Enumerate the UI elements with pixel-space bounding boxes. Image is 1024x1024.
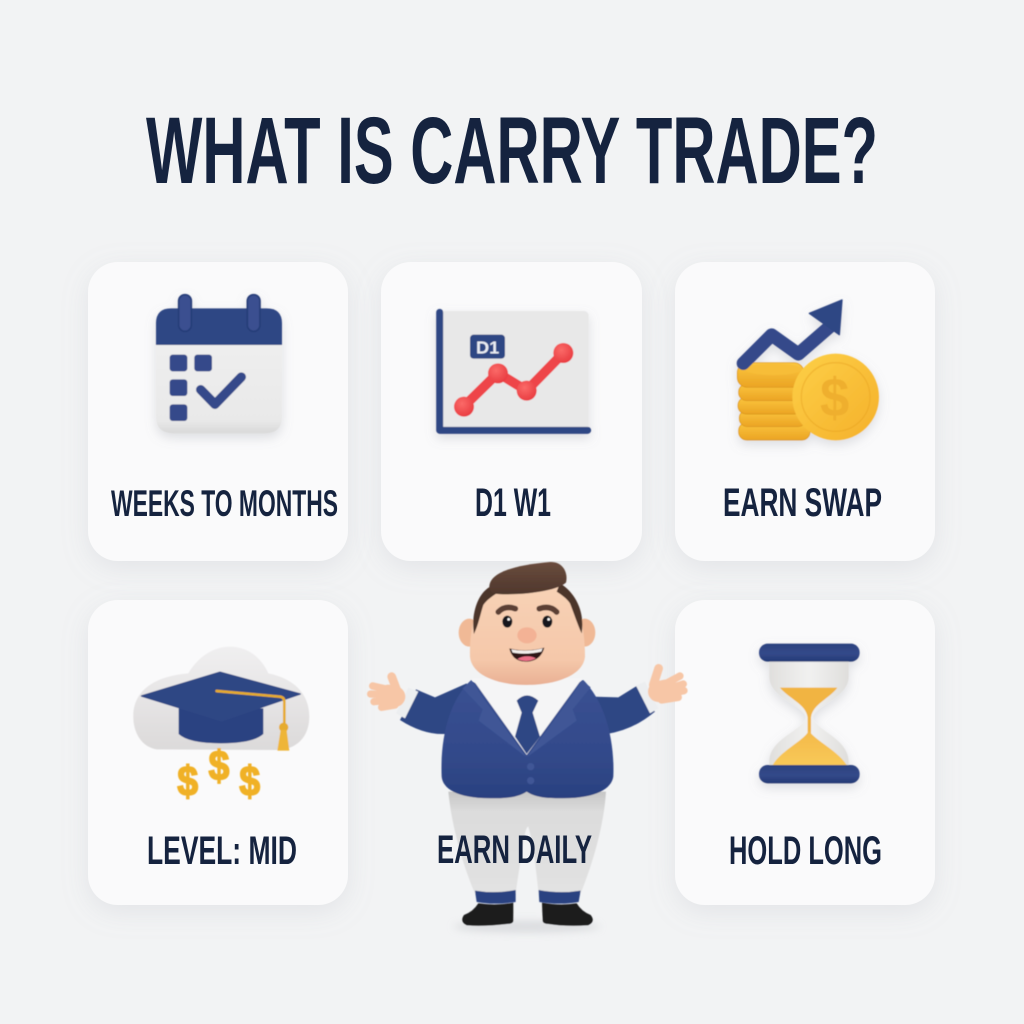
card background — [88, 600, 348, 905]
card background — [88, 262, 348, 561]
trousers — [448, 792, 606, 893]
card background — [381, 262, 642, 561]
card background — [675, 262, 935, 561]
label: EARN SWAP — [723, 481, 882, 525]
icon: graduation cap with cloud and dollars: $ — [239, 759, 260, 805]
shirt — [472, 678, 582, 755]
eyebrows — [498, 607, 557, 612]
right cuff — [636, 682, 658, 713]
right hand — [653, 668, 684, 700]
shoes — [462, 903, 593, 926]
panel: hold long — [675, 600, 935, 905]
nose — [517, 627, 537, 643]
trouser cuffs — [475, 890, 581, 904]
icon: coins and rising arrow: $ — [820, 367, 849, 429]
icon: hourglass — [759, 644, 860, 783]
panel: weeks to months — [88, 262, 348, 561]
icon: graduation cap with cloud and dollars: $ — [177, 759, 198, 805]
icon: graduation cap with cloud and dollars: $ — [209, 743, 229, 789]
right arm — [577, 682, 655, 734]
card background — [675, 600, 935, 905]
ground shadow — [453, 921, 600, 933]
jacket body — [441, 680, 613, 798]
side hair — [473, 583, 582, 634]
label: D1 W1 — [475, 481, 551, 525]
mouth — [509, 648, 544, 662]
label: LEVEL: MID — [147, 829, 297, 873]
left hand — [371, 677, 397, 707]
icon: line chart: D1 — [476, 337, 500, 357]
panel: level mid — [88, 600, 348, 905]
icon: calendar — [156, 295, 282, 433]
ears — [459, 619, 480, 647]
tie — [515, 695, 540, 754]
panel: D1 W1 — [381, 262, 642, 561]
lapels — [463, 680, 527, 757]
character: businessman — [371, 562, 684, 933]
buttons — [527, 763, 534, 770]
label: WEEKS TO MONTHS — [111, 483, 338, 524]
hair — [489, 562, 567, 594]
icon: coins and rising arrow — [737, 300, 879, 440]
label: earn daily: EARN DAILY — [437, 828, 592, 872]
face — [470, 583, 585, 685]
icon: graduation cap with cloud and dollars — [133, 647, 309, 805]
label: HOLD LONG — [729, 829, 882, 873]
left arm — [400, 683, 477, 734]
eyes — [502, 616, 552, 628]
left cuff — [396, 688, 418, 718]
panel: earn swap — [675, 262, 935, 561]
icon: line chart — [439, 311, 589, 430]
